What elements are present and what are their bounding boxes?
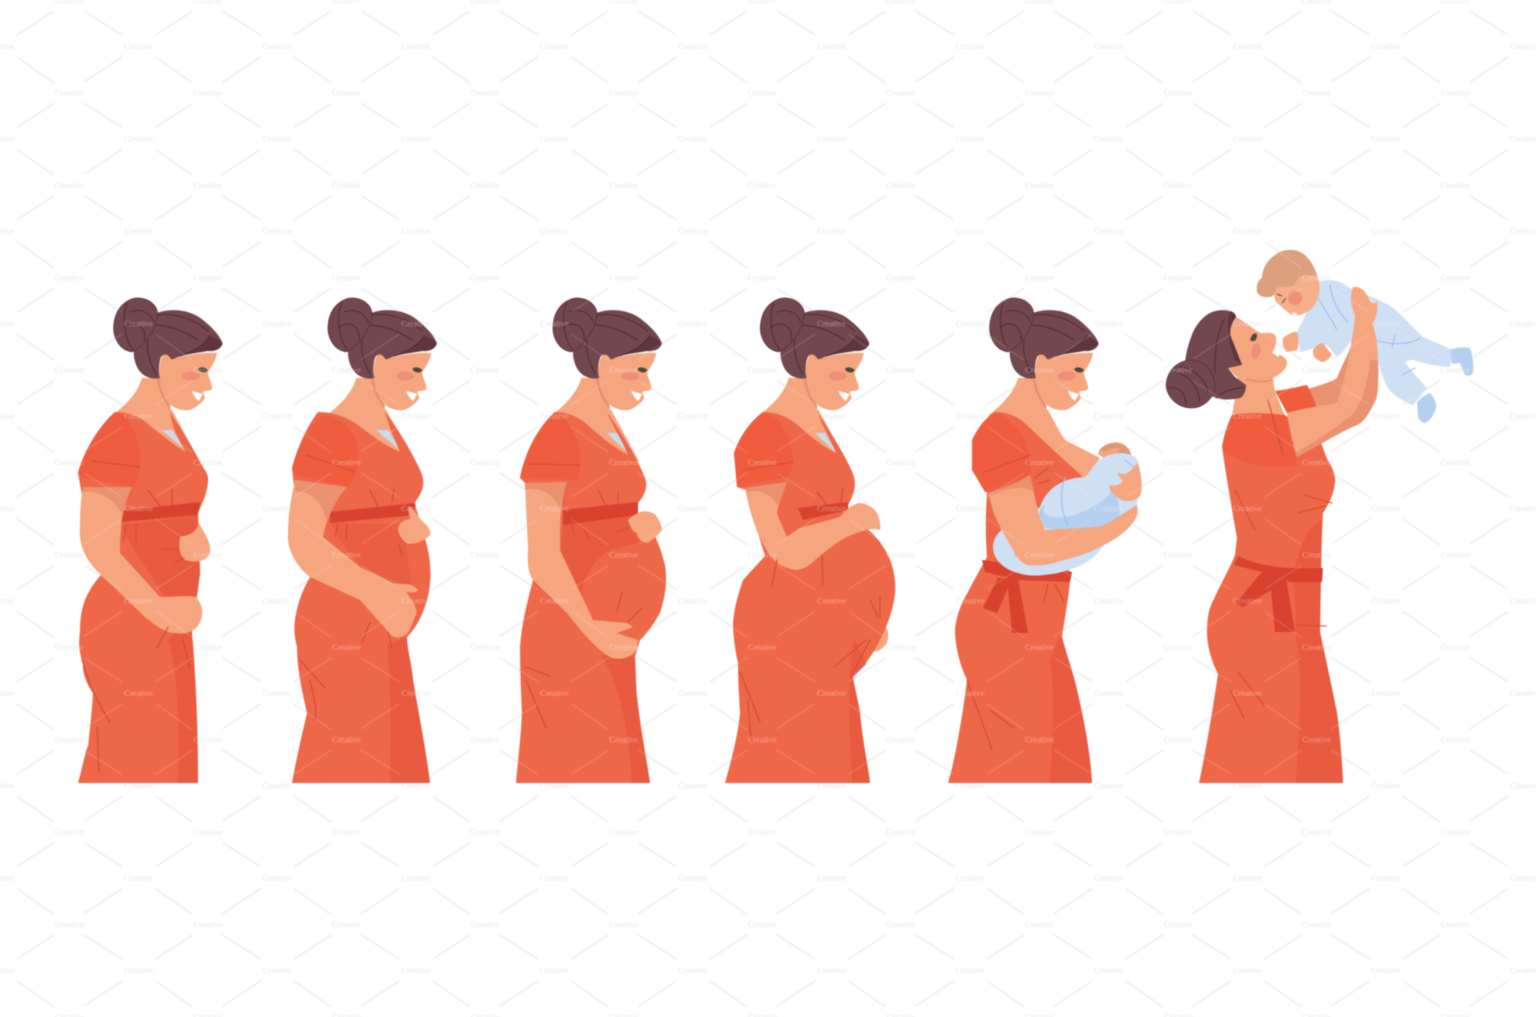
arm near — [525, 482, 638, 659]
head of figure 4 — [759, 298, 869, 462]
near arm — [1287, 348, 1378, 457]
belt — [798, 502, 848, 520]
belt — [120, 502, 200, 522]
figure 4: full-term belly — [725, 298, 895, 783]
neck and face — [1225, 317, 1287, 416]
undershirt — [815, 433, 838, 455]
arm near — [288, 480, 418, 637]
figure 3: round belly — [516, 298, 666, 783]
sleeve — [972, 412, 1031, 492]
belt — [330, 503, 415, 523]
blanket — [993, 453, 1140, 576]
undershirt — [607, 433, 630, 455]
baby head — [1098, 442, 1131, 462]
baby feet — [1417, 347, 1473, 423]
baby body — [1297, 280, 1453, 405]
belt tails — [983, 578, 1028, 633]
far arm — [1305, 348, 1362, 412]
arm near — [988, 475, 1138, 566]
folds — [740, 488, 880, 738]
dress — [948, 412, 1092, 783]
neck fold — [1246, 379, 1272, 381]
belt and tails — [1234, 556, 1323, 632]
dress — [1199, 413, 1343, 783]
lower hand — [867, 623, 888, 652]
blush and features — [1250, 342, 1262, 360]
folds — [300, 489, 402, 720]
arm near — [745, 482, 880, 570]
upper hand — [398, 506, 430, 544]
head of figure 3 — [551, 298, 662, 462]
baby fist — [1283, 332, 1298, 352]
sleeve — [520, 412, 580, 480]
belt — [563, 502, 638, 525]
folds — [1230, 400, 1332, 718]
upper hand — [628, 511, 662, 543]
far hand on baby — [1109, 463, 1142, 501]
chest skin — [995, 410, 1100, 480]
shoulder sleeve — [1275, 385, 1317, 413]
sleeve — [292, 414, 358, 487]
baby hand — [1313, 343, 1332, 362]
sleeve — [734, 412, 793, 487]
hair — [1185, 310, 1246, 400]
dress shadow — [168, 630, 198, 783]
arm near — [80, 487, 202, 634]
head of figure 2 — [326, 298, 437, 462]
dress shadow — [387, 637, 430, 783]
dress — [516, 412, 666, 783]
head of figure 1 — [112, 298, 222, 462]
figure 1: early pregnancy — [78, 298, 222, 783]
dress — [725, 412, 895, 783]
dress shadow — [560, 515, 650, 783]
folds — [967, 584, 1064, 750]
figure 6: lifting the baby — [1166, 250, 1473, 783]
forearm and hand on baby — [1350, 287, 1378, 360]
far hand — [179, 523, 210, 561]
dress — [292, 412, 431, 783]
baby hair — [1257, 250, 1317, 297]
figure 5: holding newborn — [948, 298, 1142, 783]
sleeve — [78, 412, 140, 487]
belt behind blanket — [982, 560, 1072, 582]
dress shadow — [1050, 637, 1092, 783]
figure 2: growing belly — [288, 298, 437, 783]
undershirt — [376, 430, 402, 452]
undershirt — [162, 430, 188, 452]
newborn in blanket — [982, 442, 1140, 582]
dress — [78, 412, 208, 783]
folds — [82, 490, 190, 773]
dress shadow — [849, 640, 870, 783]
head of figure 5 — [988, 298, 1098, 462]
folds — [525, 490, 642, 728]
baby face — [1272, 273, 1320, 315]
dress shadow — [1294, 520, 1343, 783]
baby — [1257, 250, 1473, 423]
